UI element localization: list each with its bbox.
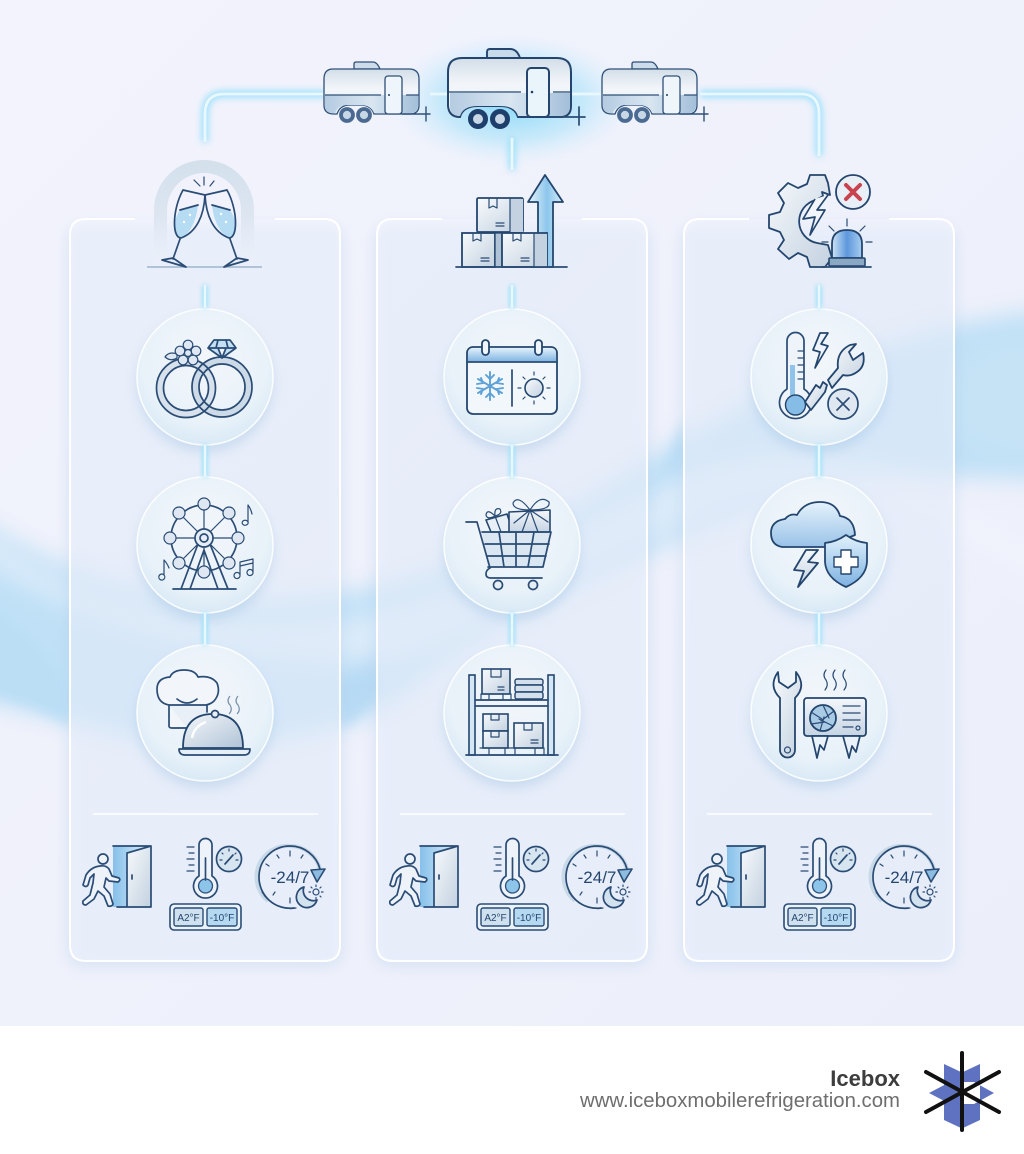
icon: thermometer, gauge and temperature display [170,838,242,930]
icon: wedding rings with flower and diamond [156,340,252,418]
icon: person entering door [390,846,458,907]
connector disc: catering [137,645,273,788]
icon: thermometer, gauge and temperature display: A2°F [791,913,814,924]
connector disc: storm protection [751,477,887,620]
trailer: right small [602,62,708,121]
icon: 24/7 clock [870,846,939,908]
icon: thermometer, gauge and temperature display: -10°F [824,913,848,924]
card 1 [66,219,344,968]
footer brand text: www.iceboxmobilerefrigeration.com [579,1090,900,1112]
icon: thermometer, gauge and temperature display: A2°F [484,913,507,924]
card 3 [680,219,958,968]
footer brand text: Icebox [830,1066,901,1091]
connector disc: wedding [137,309,273,452]
background waves [0,310,1024,745]
connector disc: retail [444,477,580,620]
connector disc: seasonal [444,309,580,452]
icon: thermometer, gauge and temperature display [477,838,548,930]
vertical connectors between discs [205,285,819,645]
feature row: access, temperature, 24/7 [697,838,939,930]
icon: wrench and frozen AC unit [773,670,866,758]
feature row: access, temperature, 24/7 [83,838,325,930]
panel: column 3 emergencies [680,175,958,968]
icon: 24/7 clock: -24/7 [271,868,309,887]
icon: thermometer, gauge and temperature display: -10°F [210,913,234,924]
icon: thermometer, bolt, broken wrench [779,333,864,419]
icon: thermometer, gauge and temperature display [784,838,856,930]
icon: calendar with snowflake and sun [467,340,557,414]
icon: thermometer, gauge and temperature display: -10°F [517,913,541,924]
connector disc: festival [137,477,273,620]
connector disc: warehouse [444,645,580,788]
icon: person entering door [83,846,151,907]
panel: column 1 events [66,160,344,968]
icon: thermometer, gauge and temperature display: A2°F [177,913,200,924]
connector disc: equipment failure [751,309,887,452]
card 2 [373,219,651,968]
panel: column 2 peak demand [373,175,651,968]
icon: ferris wheel and music notes [159,498,253,589]
trailer: left small [324,62,430,121]
central glow behind trailers [390,34,634,166]
icon: chef hat and cloche [157,670,250,755]
icon: 24/7 clock [256,846,325,908]
connector lines from trailers to columns [205,94,819,170]
icon: stacked boxes with up arrow [456,175,567,267]
icon: 24/7 clock: -24/7 [578,868,616,887]
icon: person entering door [697,846,765,907]
icon: 24/7 clock: -24/7 [885,868,923,887]
icon: storm cloud and shield [771,502,867,587]
icon: toasting champagne glasses under arch [147,160,262,267]
connector disc: maintenance [751,645,887,788]
footer band [0,1026,1024,1154]
icon: shopping cart with gifts [466,499,551,590]
feature row: access, temperature, 24/7 [390,838,632,930]
icon: Icebox snowflake logo [926,1053,999,1130]
trailer: center large [448,49,585,126]
footer brand text [579,1066,901,1112]
icon: broken gear, red X and siren [769,175,872,267]
icon: 24/7 clock [563,846,632,908]
icon: warehouse shelving with boxes [466,669,558,755]
